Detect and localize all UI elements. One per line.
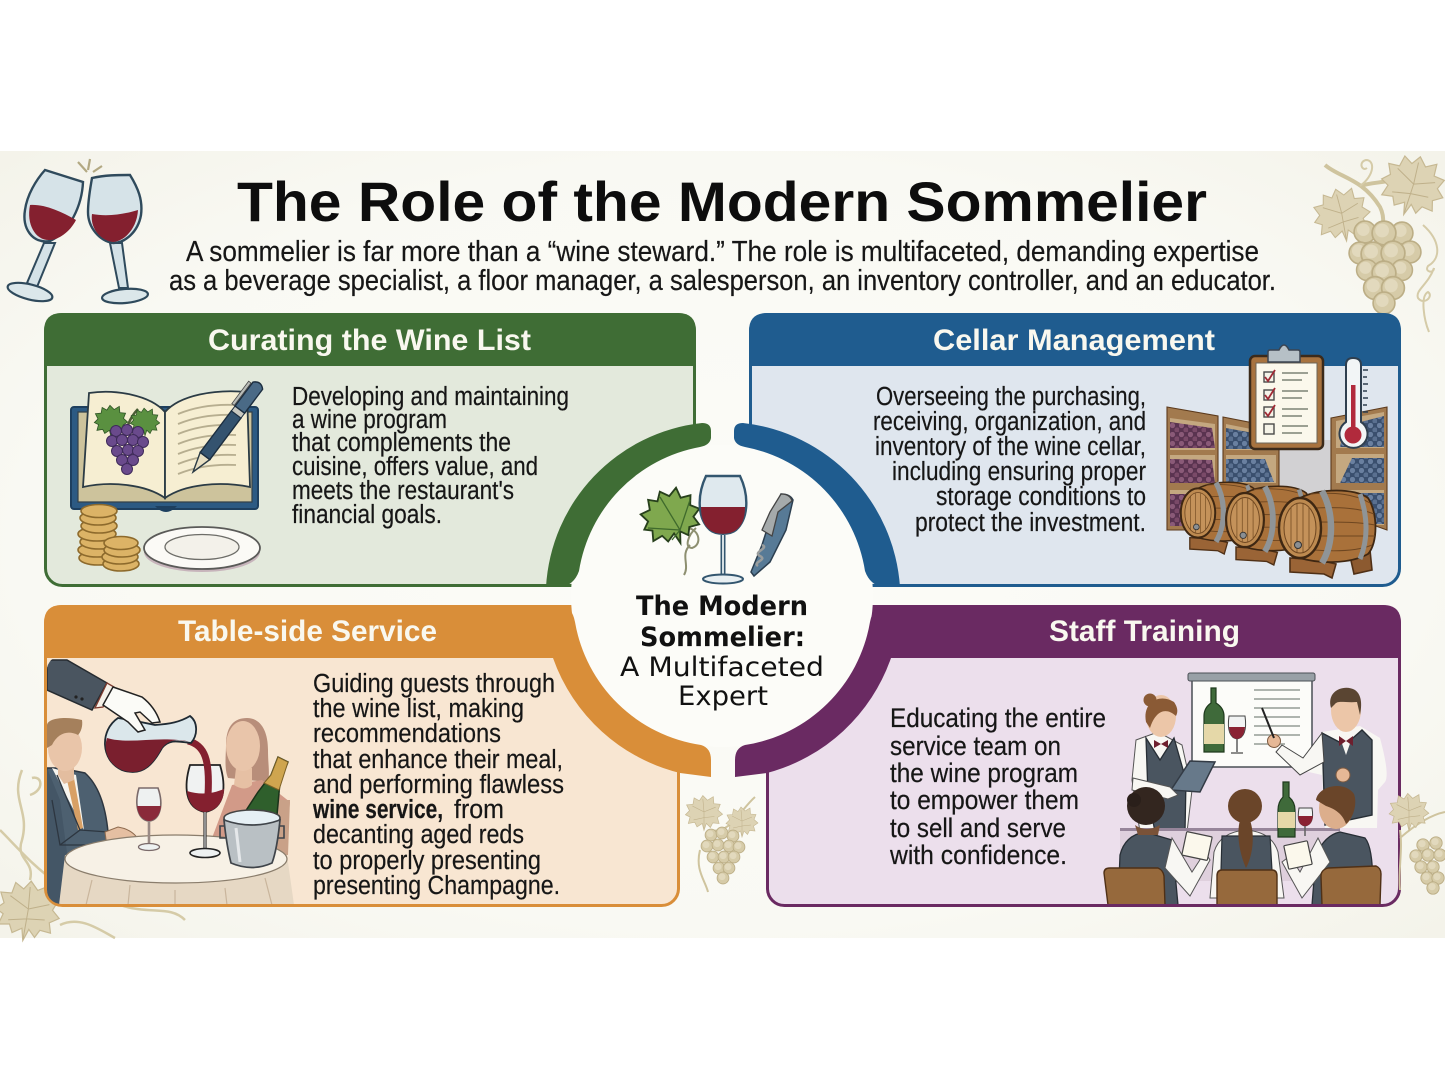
centre label: Sommelier: — [640, 622, 805, 653]
table — [59, 835, 294, 905]
body text: cellar: receiving, organization, and — [873, 408, 1146, 436]
man guest — [47, 718, 140, 905]
heading: Staff Training: Staff Training — [1049, 615, 1240, 648]
body text: cellar: storage conditions to — [936, 483, 1146, 511]
body text: training — [889, 703, 1106, 870]
body text: service: and performing flawless — [313, 771, 564, 799]
panel: Cellar Management — [749, 313, 1401, 586]
icon: open book with grapes — [71, 377, 264, 512]
body text: training: Educating the entire — [890, 703, 1106, 733]
heading: Cellar Management: Cellar Management — [933, 324, 1215, 357]
arc: purple — [735, 605, 899, 777]
body text: service: wine service, — [312, 796, 443, 824]
icon: coin stacks — [78, 504, 140, 571]
body text: cellar: protect the investment. — [915, 509, 1146, 537]
decoration: bottom-left vine — [0, 770, 185, 946]
body text: training: to empower them — [890, 785, 1079, 815]
ice bucket with champagne — [220, 757, 288, 868]
body text: cellar — [873, 383, 1146, 537]
decoration: top-right grape vine — [1310, 148, 1445, 332]
panel: Curating the Wine List — [44, 313, 696, 586]
body text: service: Guiding guests through — [313, 670, 555, 698]
large wine glass — [187, 765, 224, 858]
body text: service: the wine list, making — [313, 695, 524, 723]
icon: pen — [185, 377, 264, 476]
body text: service: from — [454, 796, 504, 824]
arc: green — [546, 423, 711, 587]
paper background — [0, 151, 1445, 938]
body text: wine list: meets the restaurant's — [292, 477, 514, 505]
body text: wine list — [292, 383, 569, 529]
body text: service: that enhance their meal, — [313, 746, 563, 774]
centre label: Expert — [678, 681, 768, 712]
decoration: bottom-right vine — [1389, 793, 1445, 894]
projector screen — [1188, 673, 1315, 767]
body text: cellar: Overseeing the purchasing, — [876, 383, 1146, 411]
illustration: oak barrels — [1181, 482, 1376, 578]
illustration: clinking wine glasses — [6, 159, 149, 305]
title: The Role of the Modern Sommelier — [237, 170, 1207, 233]
arc: orange — [546, 605, 711, 777]
icon: clipboard checklist — [1250, 345, 1323, 449]
centre ring: four coloured arcs — [546, 423, 900, 777]
centre icon: wine glass — [700, 476, 746, 584]
body text: service: recommendations — [313, 720, 501, 748]
body text: service — [312, 670, 564, 900]
body text: training: to sell and serve — [890, 813, 1066, 843]
centre label: The Modern — [636, 591, 808, 622]
body text: training: service team on — [890, 731, 1061, 761]
centre label — [620, 591, 824, 712]
table with bottle and glass — [1120, 782, 1340, 881]
centre hub disc — [571, 445, 873, 747]
body text: wine list: a wine program — [292, 406, 447, 434]
seated student left — [1104, 787, 1212, 905]
seated student right — [1282, 786, 1381, 905]
icon: thermometer — [1340, 358, 1368, 448]
arc: blue — [734, 423, 900, 587]
illustration: table-side wine service — [47, 660, 294, 905]
body text: service: decanting aged reds — [313, 821, 524, 849]
small wine glass — [137, 788, 161, 850]
body text: cellar: including ensuring proper — [892, 458, 1146, 486]
body text: wine list: Developing and maintaining — [292, 383, 569, 411]
illustration: wine racks — [1167, 407, 1387, 530]
icon: dinner plate — [144, 527, 260, 572]
heading: Table-side Service: Table-side Service — [178, 615, 437, 648]
trainer — [1262, 688, 1387, 828]
intro text: as a beverage specialist, a floor manager, a salesperson, an inventory controller, and an educator. — [169, 265, 1276, 297]
decoration: centre-bottom vine — [685, 796, 758, 892]
heading: Curating the Wine List: Curating the Wine List — [208, 324, 531, 357]
body text: wine list: financial goals. — [292, 501, 442, 529]
centre label: A Multifaceted — [620, 652, 824, 683]
centre icon: corkscrew — [751, 494, 793, 576]
body text: wine list: that complements the — [292, 429, 511, 457]
panel: Staff Training — [766, 605, 1401, 906]
intro text: A sommelier is far more than a “wine steward.” The role is multifaceted, demanding expertise — [186, 236, 1259, 268]
panel: Table-side Service — [44, 605, 680, 906]
body text: service: presenting Champagne. — [313, 872, 560, 900]
body text: training: the wine program — [890, 758, 1078, 788]
wine stream — [188, 741, 208, 795]
illustration: staff training session — [1104, 673, 1387, 905]
centre icon: grape leaf — [634, 481, 708, 575]
woman trainer with tablet — [1132, 694, 1215, 832]
body text: service: to properly presenting — [313, 847, 541, 875]
seated student middle — [1210, 789, 1284, 905]
body text: cellar: inventory of the wine cellar, — [875, 433, 1146, 461]
intro text — [169, 236, 1276, 297]
body text: wine list: cuisine, offers value, and — [292, 453, 538, 481]
decanter — [105, 716, 196, 772]
glove and sleeve — [47, 660, 160, 732]
woman guest — [212, 718, 290, 855]
body text: training: with confidence. — [889, 840, 1067, 870]
